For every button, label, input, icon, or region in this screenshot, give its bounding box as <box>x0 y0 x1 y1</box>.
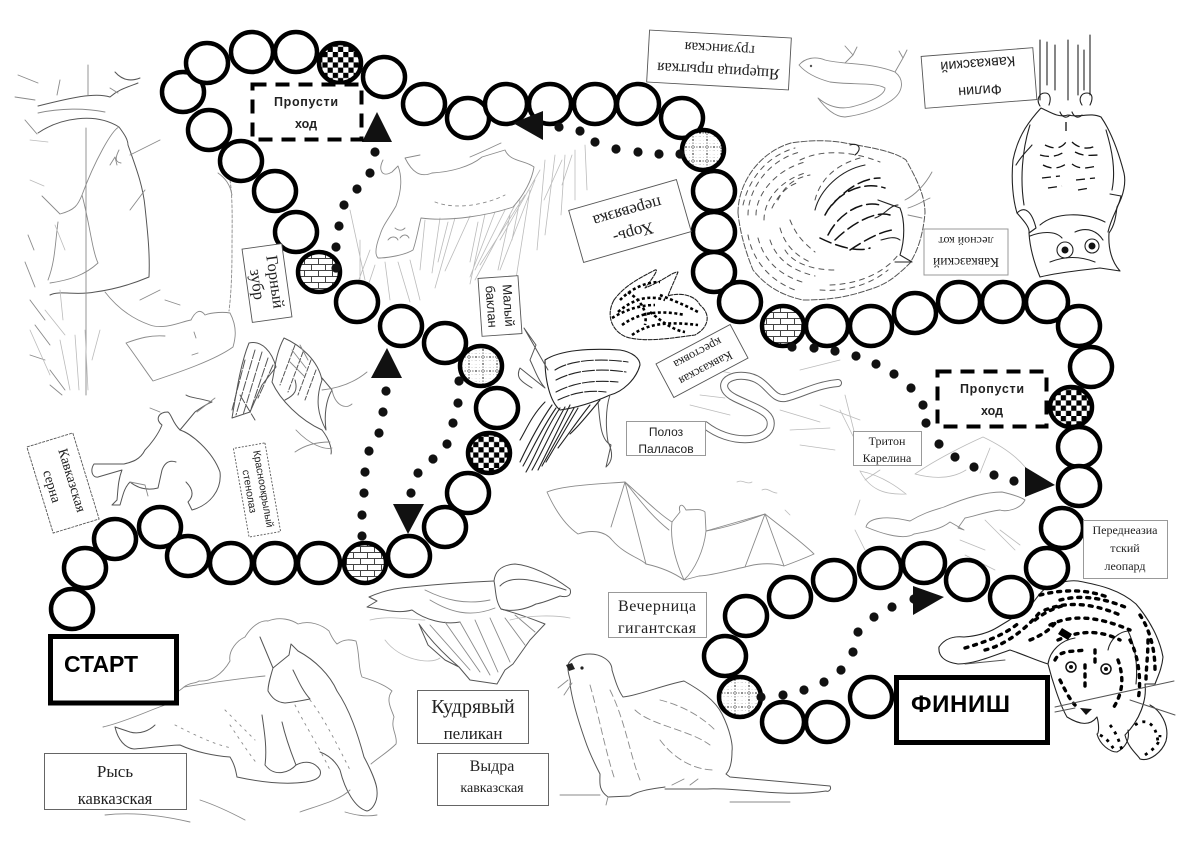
dotted shortcut: grid to left arrow <box>554 122 685 159</box>
illustration: toad <box>610 270 707 340</box>
label: Caucasian otter: Выдра <box>470 758 514 775</box>
label: mountain bison <box>242 244 292 322</box>
label: Caucasian cross frog <box>656 325 748 397</box>
skip turn box right: Пропусти <box>960 382 1024 396</box>
illustration: wallcreeper bird <box>232 338 367 454</box>
dotted shortcut: brick to upward arrow near skip box <box>331 147 380 273</box>
checker space 3 <box>1050 387 1092 427</box>
dotted shortcut: grid to downward arrow <box>406 376 464 498</box>
label: Pallas's rat snake: Полоз <box>649 425 684 439</box>
arrow: left top <box>513 111 543 140</box>
start box: СТАРТ <box>64 651 138 677</box>
checker space 1 <box>468 433 510 473</box>
label: Caucasian chamois: серна <box>39 469 63 506</box>
label: Dalmatian pelican: Кудрявый <box>431 696 515 718</box>
illustration: Pallas's cat <box>738 141 932 300</box>
finish box: ФИНИШ <box>911 691 1010 718</box>
skip turn box left: Пропусти <box>274 95 338 109</box>
label: Caucasian chamois: Кавказская <box>54 447 88 515</box>
label: Caucasian eagle owl <box>921 48 1037 108</box>
illustration: ferret and grass <box>350 143 587 302</box>
label: Caucasian lynx <box>44 754 186 810</box>
illustration: mountain bison <box>15 65 235 395</box>
grid space 1 <box>460 346 502 386</box>
label: Pallas's rat snake <box>626 422 706 456</box>
label: Persian leopard <box>1084 520 1168 578</box>
skip turn box left <box>252 84 362 140</box>
illustration: bat <box>547 481 814 580</box>
label: pygmy cormorant <box>478 276 522 336</box>
label: wallcreeper: Красноокрылый <box>250 449 276 529</box>
arrow: up near first skip box <box>362 112 392 142</box>
illustration: snake <box>690 360 860 450</box>
label: giant noctule: гигантская <box>618 620 697 637</box>
label: marbled polecat: Хорь- <box>610 218 656 248</box>
label: pygmy cormorant: Малый <box>500 284 517 327</box>
illustration: newt and leaves <box>855 437 1025 570</box>
grid space 2 <box>682 130 724 170</box>
label: Persian leopard: тский <box>1110 541 1140 555</box>
label: Pallas's rat snake: Палласов <box>638 442 694 456</box>
label: wallcreeper: стенолаз <box>239 469 259 514</box>
label: Caucasian cross frog: Кавказская <box>676 348 735 388</box>
label: giant noctule <box>608 592 706 638</box>
illustration: lizard <box>799 46 907 117</box>
checker space 2 <box>319 43 361 83</box>
finish box <box>896 678 1048 742</box>
label: marbled polecat: перевязка <box>590 193 664 231</box>
label: Caucasian cross frog: крестовка <box>671 335 724 372</box>
grid space 3 <box>719 677 761 717</box>
skip turn box right <box>938 372 1046 426</box>
label: Caucasian wildcat: лесной кот <box>938 234 994 248</box>
label: Georgian sand lizard: грузинская <box>684 38 755 58</box>
dotted shortcut: brick to right arrow <box>787 342 1019 486</box>
label: Caucasian lynx: кавказская <box>78 789 153 808</box>
label: Caucasian otter <box>438 754 548 806</box>
label: Karelin's newt <box>854 432 922 466</box>
brick space 1 <box>344 543 386 583</box>
label: wallcreeper <box>233 443 281 537</box>
label: marbled polecat <box>569 180 691 262</box>
label: Persian leopard: леопард <box>1104 559 1146 573</box>
label: Caucasian wildcat <box>924 229 1008 275</box>
illustration: otter <box>558 654 831 805</box>
label: Caucasian eagle owl: Филин <box>958 80 1002 100</box>
arrow: right bottom <box>913 586 944 615</box>
brick space 2 <box>298 252 340 292</box>
illustration: chamois <box>92 395 220 510</box>
label: Georgian sand lizard <box>647 30 791 90</box>
label: Karelin's newt: Тритон <box>869 434 906 448</box>
arrow: down centre <box>393 504 424 534</box>
brick space 3 <box>762 306 804 346</box>
label: Caucasian eagle owl: Кавказский <box>940 52 1016 74</box>
arrow: right to last stretch <box>1025 467 1055 497</box>
illustration: owl on trunk <box>1012 35 1125 277</box>
skip turn box right: ход <box>981 404 1003 418</box>
label: mountain bison: Горный <box>262 254 289 310</box>
label: pygmy cormorant: баклан <box>483 285 500 328</box>
illustration: cormorant <box>518 328 640 472</box>
spaces along the route <box>51 32 1112 742</box>
label: Karelin's newt: Карелина <box>863 451 912 465</box>
label: Caucasian wildcat: Кавказский <box>933 255 999 270</box>
label: Georgian sand lizard: Ящерица прыткая <box>656 59 780 82</box>
skip turn box left: ход <box>295 117 317 131</box>
label: Dalmatian pelican: пеликан <box>444 724 502 743</box>
dotted shortcut: lower brick to upward arrow <box>357 386 391 541</box>
start box <box>50 636 176 703</box>
illustration: lynx <box>103 619 396 822</box>
arrow: up centre <box>371 348 402 378</box>
label: Persian leopard: Переднеазиа <box>1093 523 1158 537</box>
label: Caucasian chamois <box>27 433 99 533</box>
illustration: leopard <box>939 581 1175 760</box>
label: Dalmatian pelican <box>418 690 528 744</box>
illustration: Dalmatian pelican <box>367 564 571 684</box>
label: Caucasian lynx: Рысь <box>97 762 133 781</box>
dotted shortcut: grid to final arrow <box>756 594 919 702</box>
label: Caucasian otter: кавказская <box>460 781 524 796</box>
label: giant noctule: Вечерница <box>618 598 696 615</box>
label: mountain bison: зубр <box>246 268 269 301</box>
